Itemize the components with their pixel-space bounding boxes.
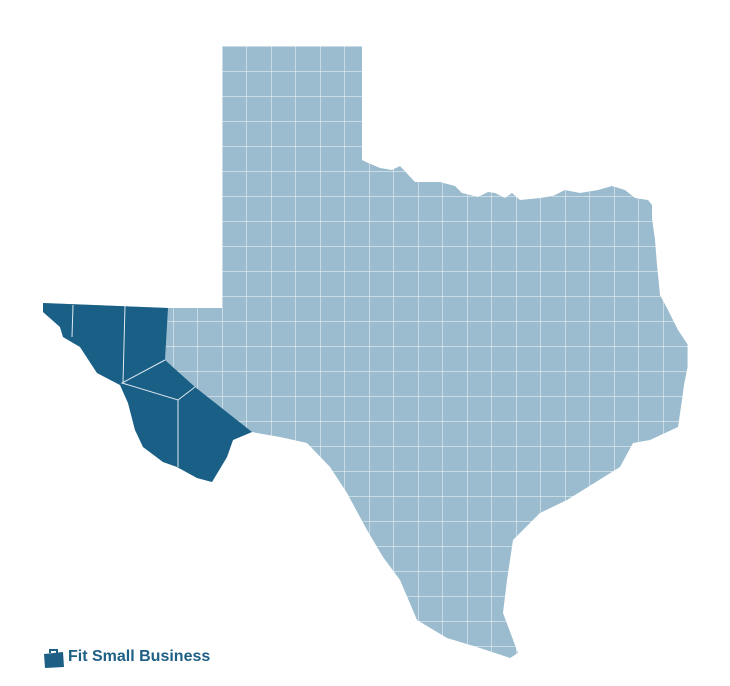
state shape (43, 46, 688, 658)
map: Texas counties (43, 46, 688, 658)
highlighted region: West Texas counties (43, 303, 252, 482)
logo text: Fit Small Business (68, 648, 210, 665)
icon: briefcase (44, 649, 64, 668)
logo: Fit Small Business (44, 648, 210, 668)
